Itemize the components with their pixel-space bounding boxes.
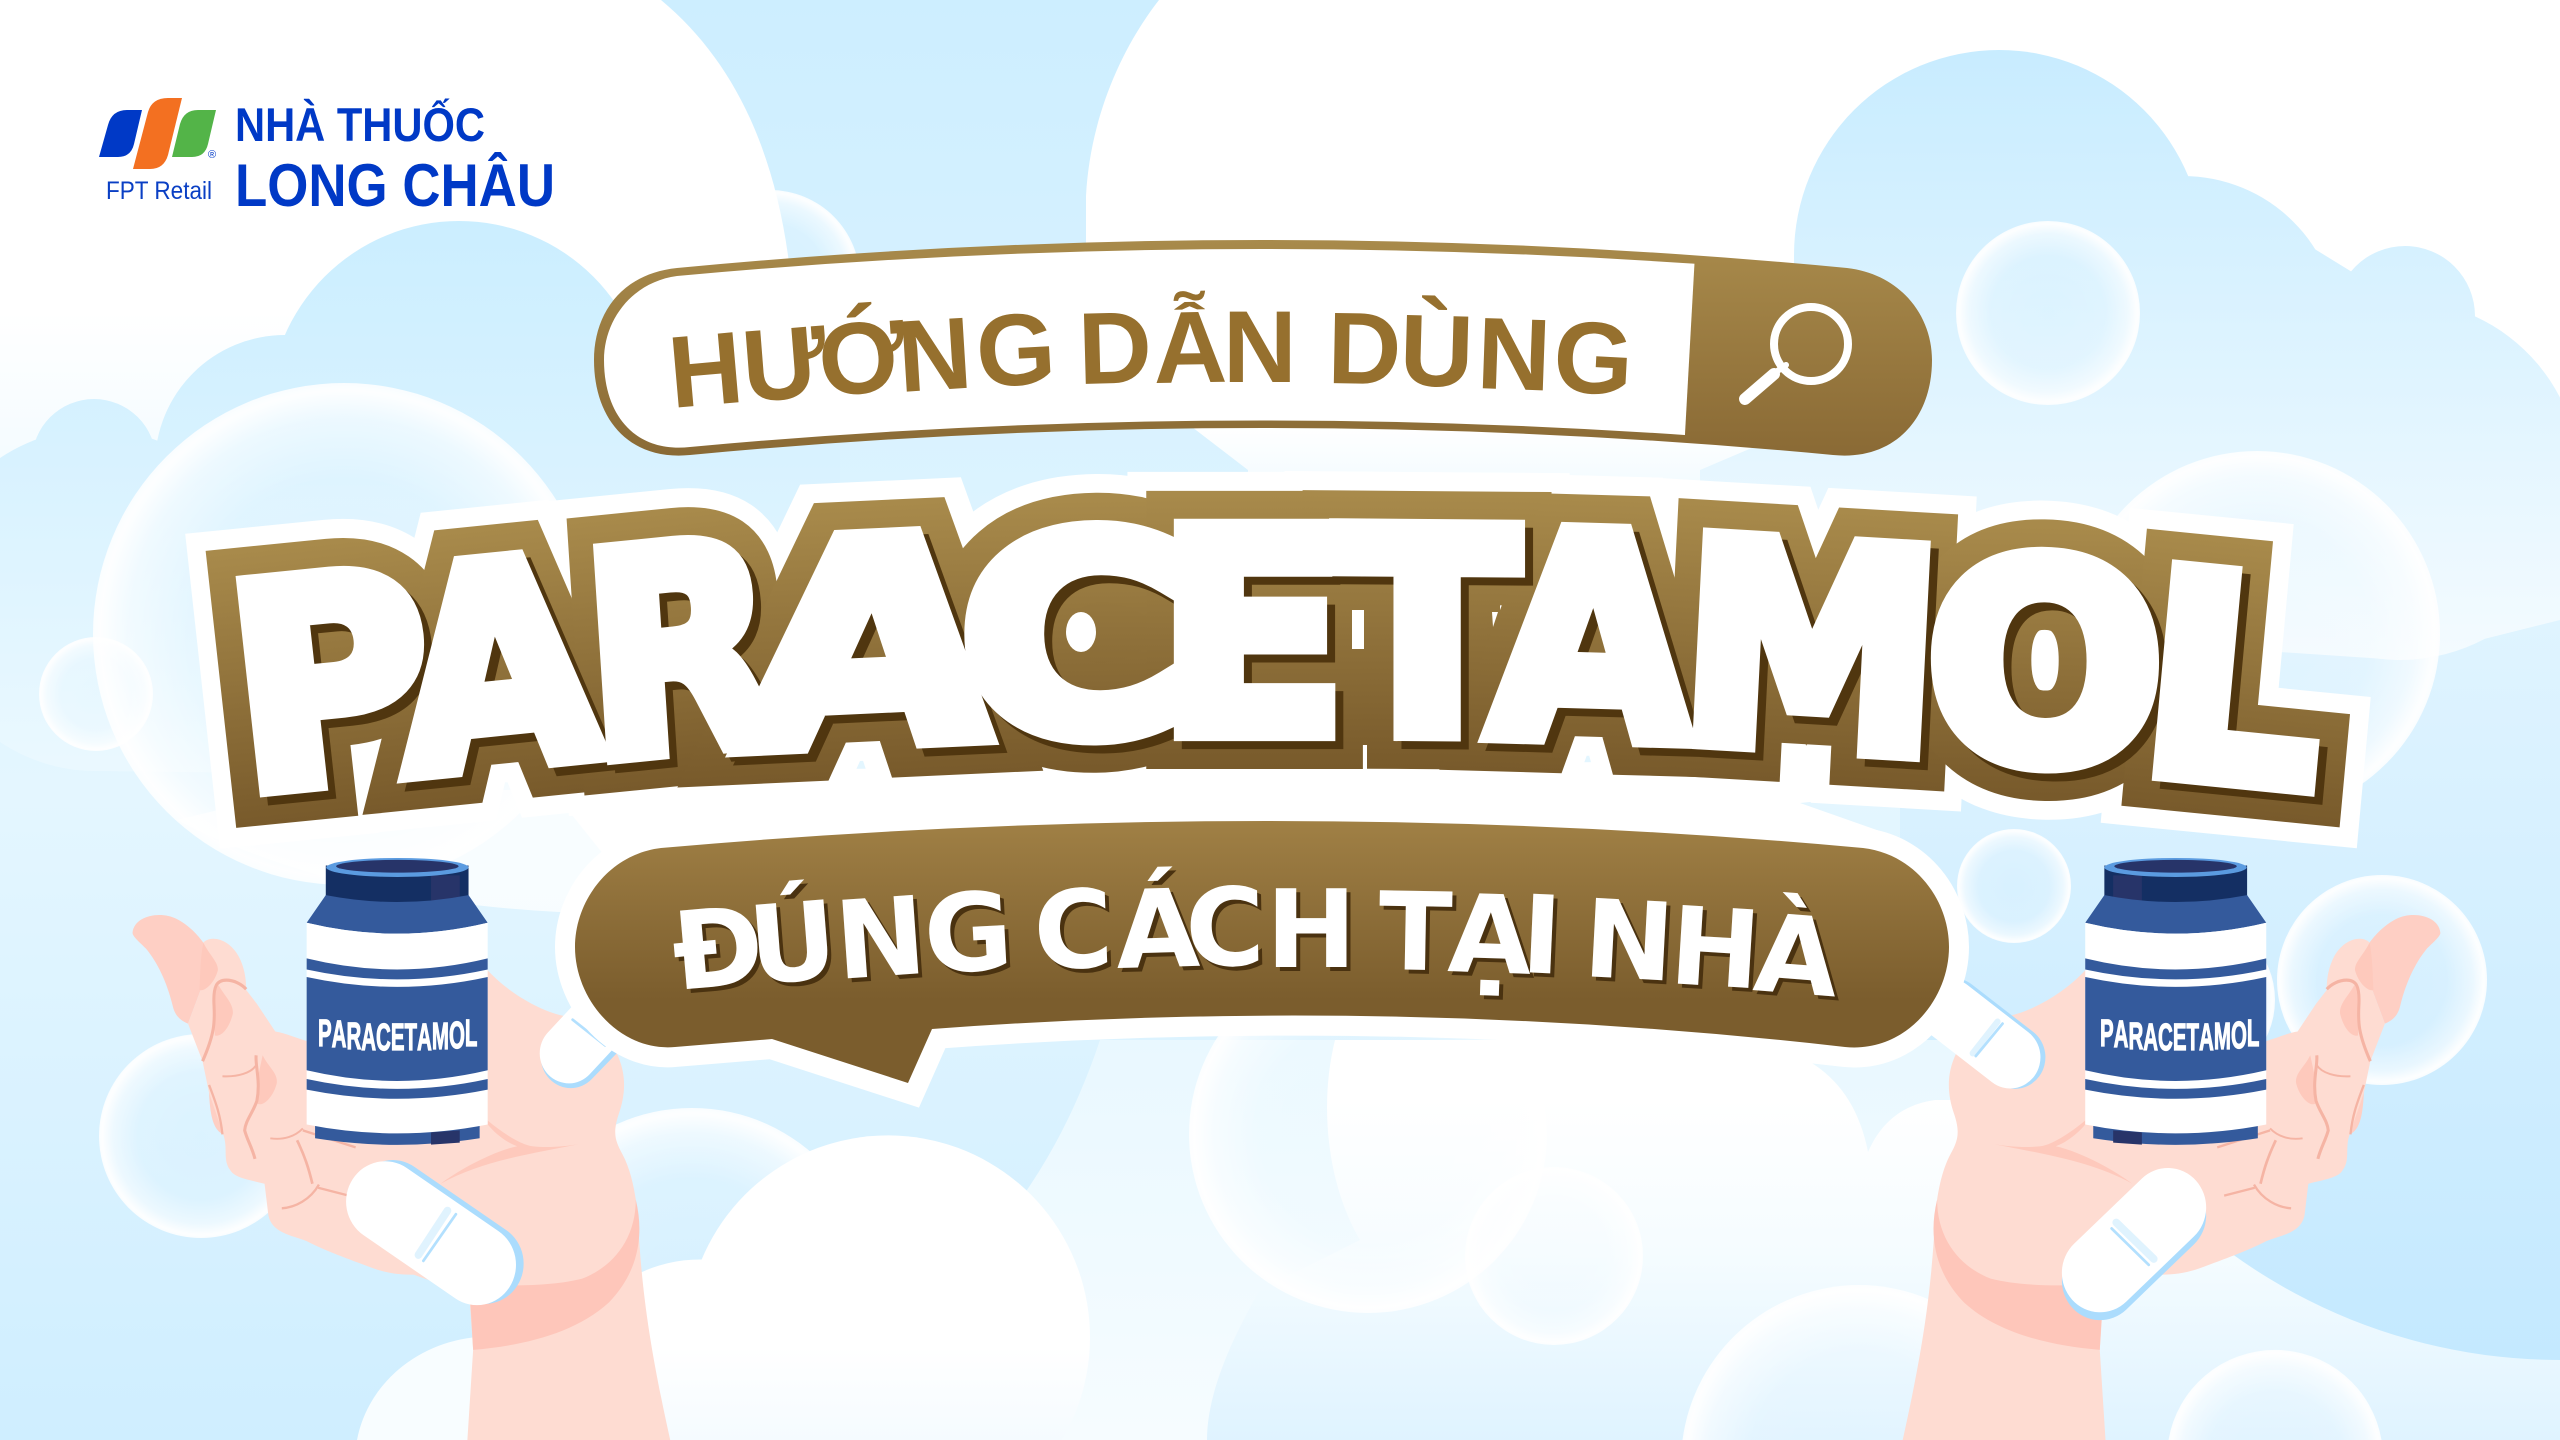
subtitle speech bubble: [575, 821, 1949, 1083]
small pill right: [1954, 1010, 2015, 1057]
bubble body: [575, 821, 1949, 1083]
lower blue panel right: [1900, 520, 2560, 1440]
title white halo: C: [959, 477, 1185, 799]
title dark shadow: P: [223, 520, 456, 865]
bottle neck: [2104, 865, 2247, 903]
subtitle white letters: ĐÚNG CÁCH TẠI NHÀ: [667, 865, 1844, 1023]
white haze below title left: [177, 790, 720, 912]
subtitle shadow: ĐÚNG CÁCH TẠI NHÀ: [671, 869, 1848, 1027]
left medicine bottle: [307, 858, 488, 1145]
white backing between title and subtitle: [560, 760, 1900, 900]
logo mark green: [172, 110, 216, 157]
heading text: HƯỚNG DẪN DÙNG: [664, 290, 1636, 430]
title brown plate between letters: [1030, 590, 1500, 745]
title white letters: C: [959, 477, 1185, 799]
logo mark blue: [99, 110, 142, 157]
back finger shade: [209, 1085, 223, 1134]
bottle stripes and label: [2085, 958, 2266, 1099]
logo mark orange: [133, 98, 182, 169]
title white halo: O: [1926, 502, 2164, 828]
finger creases: [203, 980, 356, 1208]
FPT Retail wordmark: FPT Retail: [106, 177, 212, 205]
title brown outline: A: [734, 476, 1007, 815]
title dark shadow: C: [967, 485, 1193, 807]
title white halo: A: [734, 476, 1007, 815]
Nhà thuốc wordmark: NHÀ THUỐC: [235, 98, 485, 151]
title white halo: T: [1336, 473, 1519, 800]
title white halo: L: [2130, 512, 2338, 854]
bottle shoulder: [307, 895, 488, 934]
palm and arm: [188, 939, 670, 1440]
title dark shadow: [223, 480, 2346, 865]
title dark shadow: A: [742, 484, 1015, 823]
large pill: [385, 1200, 485, 1265]
bubble halo: [575, 821, 1949, 1083]
blue cloud left: [0, 221, 840, 780]
large pill right: [2100, 1215, 2168, 1281]
bottle label text: PARACETAMOL: [318, 1012, 477, 1059]
title brown outline: M: [1674, 480, 1949, 820]
right pills: [1949, 1010, 2168, 1281]
title brown outline: [215, 472, 2338, 857]
title white letters: A: [734, 476, 1007, 815]
bottle neck: [326, 865, 469, 903]
title white halo: R: [575, 481, 786, 824]
title white halo: A: [386, 496, 610, 839]
small pill on thumb: [569, 1002, 620, 1057]
main title PARACETAMOL: [215, 472, 2346, 865]
mirrored hand: [1903, 915, 2440, 1440]
title brown outline: E: [1157, 472, 1347, 798]
title white letters: M: [1674, 480, 1949, 820]
white cloud top left: [0, 0, 795, 520]
white cloud lower left: [560, 1135, 1090, 1440]
bubble lower left behind arm: [510, 1108, 874, 1440]
bottle stripes and label: [307, 958, 488, 1099]
title white letters: R: [575, 481, 786, 824]
title brown outline: A: [386, 496, 610, 839]
white hump left of arm: [357, 1336, 623, 1440]
title white halo: P: [215, 512, 448, 857]
icon: magnifying glass: [1745, 307, 1848, 399]
bottle rim: [2104, 858, 2247, 877]
title white letters: A: [386, 496, 610, 839]
bottle base: [2093, 1124, 2258, 1145]
registered mark: ®: [208, 149, 216, 161]
blue cloud right: [1700, 50, 2560, 660]
title dark shadow: L: [2138, 520, 2346, 862]
title white halo: [215, 472, 2338, 857]
wrist shadow: [469, 1200, 639, 1350]
bottle shoulder: [2085, 895, 2266, 934]
title white letters: O: [1926, 502, 2164, 828]
bottle body: [2085, 923, 2266, 1133]
bottle base: [315, 1124, 480, 1145]
title dark shadow: O: [1934, 510, 2172, 836]
lighter disc lower centre: [900, 1040, 2100, 1440]
title white letters: [215, 472, 2338, 857]
bottle label text: PARACETAMOL: [2100, 1012, 2259, 1059]
search bar frame: [594, 240, 1932, 456]
search bar white field: [604, 249, 1694, 448]
blue arc right: [2000, 700, 2560, 1360]
title brown outline: P: [215, 512, 448, 857]
title white letters: T: [1336, 473, 1519, 800]
title brown outline: O: [1926, 502, 2164, 828]
title white letters: A: [1486, 473, 1700, 806]
title brown outline: L: [2130, 512, 2338, 854]
title brown outline: T: [1336, 473, 1519, 800]
left hand: [133, 915, 670, 1440]
bottle rim: [326, 858, 469, 877]
subtitle text: [667, 865, 1848, 1027]
title white letters: E: [1157, 472, 1347, 798]
bottle body: [307, 923, 488, 1133]
title white letters: L: [2130, 512, 2338, 854]
title dark shadow: T: [1344, 481, 1527, 808]
title dark shadow: A: [394, 504, 618, 847]
title white halo: A: [1486, 473, 1700, 806]
fingernail shading: [200, 943, 578, 1184]
title counter slits: [1066, 610, 1498, 652]
title brown outline: R: [575, 481, 786, 824]
title white letters: P: [215, 512, 448, 857]
title dark shadow: E: [1165, 480, 1355, 806]
title white halo: M: [1674, 480, 1949, 820]
Long Châu wordmark: LONG CHÂU: [235, 152, 555, 219]
outer finger: [133, 915, 219, 1024]
white cloud top centre: [1086, 0, 2560, 520]
title white halo: E: [1157, 472, 1347, 798]
title brown outline: C: [959, 477, 1185, 799]
white cloud lower centre: [1207, 1040, 2560, 1440]
title brown outline: A: [1486, 473, 1700, 806]
title dark shadow: R: [583, 489, 794, 832]
right medicine bottle: [2085, 858, 2266, 1145]
logo: FPT Retail Nhà thuốc Long Châu: [99, 98, 555, 219]
right hand: [1903, 915, 2440, 1440]
search bar heading: [594, 240, 1932, 456]
title dark shadow: M: [1682, 488, 1957, 828]
title dark shadow: A: [1494, 481, 1708, 814]
